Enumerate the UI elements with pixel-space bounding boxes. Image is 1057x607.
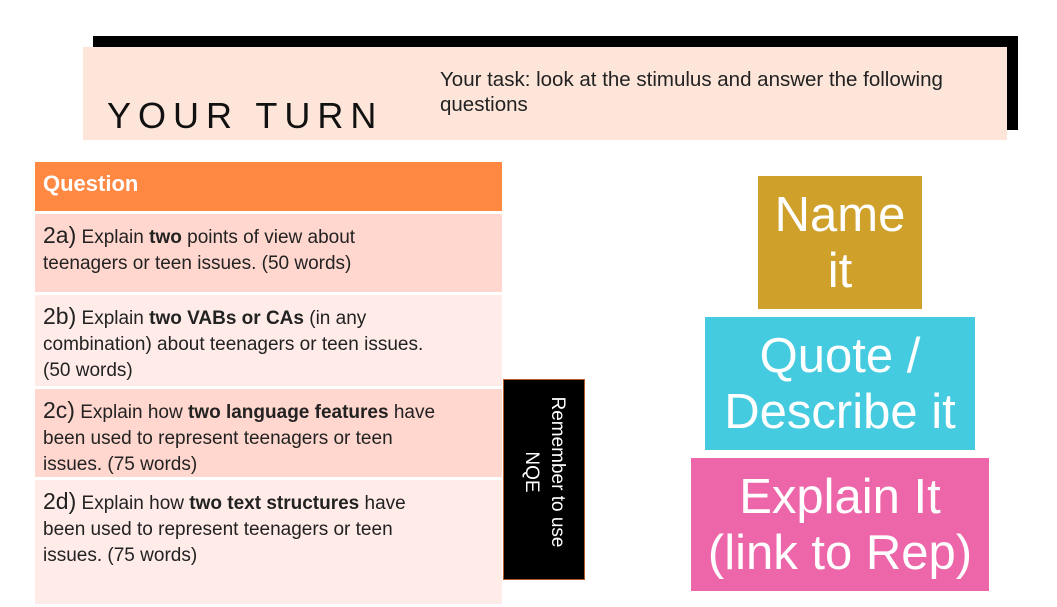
header panel <box>83 47 1007 140</box>
task text: Your task: look at the stimulus and answer the following questions <box>440 68 943 116</box>
box: Explain it: (link to Rep) <box>708 526 972 580</box>
box: Quote / Describe it: Describe it <box>724 384 956 438</box>
box: Name it: Name <box>775 188 905 242</box>
box: Explain it: Explain It <box>739 470 941 524</box>
NQE reminder box: Remember to use NQE <box>521 396 568 548</box>
row 2b: 2b) Explain two VABs or CAs (in any combination) about teenagers or teen issues. (50 words) <box>43 303 423 381</box>
box: Name it: it <box>828 244 852 298</box>
box: Name it <box>758 176 922 309</box>
row 2d: 2d) Explain how two text structures have been used to represent teenagers or teen issues. (75 words) <box>43 488 406 566</box>
row 2a: 2a) Explain two points of view about teenagers or teen issues. (50 words) <box>43 222 355 274</box>
row 2c: 2c) Explain how two language features have been used to represent teenagers or teen issues. (75 words) <box>43 397 435 475</box>
row 2d <box>35 480 502 604</box>
title: YOUR TURN <box>107 95 383 136</box>
NQE reminder box <box>503 379 585 580</box>
row 2a <box>35 214 502 292</box>
row 2b <box>35 295 502 386</box>
table header <box>35 162 502 211</box>
table header: Question <box>43 171 138 196</box>
box: Explain it <box>691 458 989 591</box>
header frame <box>93 36 1018 130</box>
box: Quote / Describe it: Quote / <box>760 328 920 382</box>
box: Quote / Describe it <box>705 317 975 450</box>
